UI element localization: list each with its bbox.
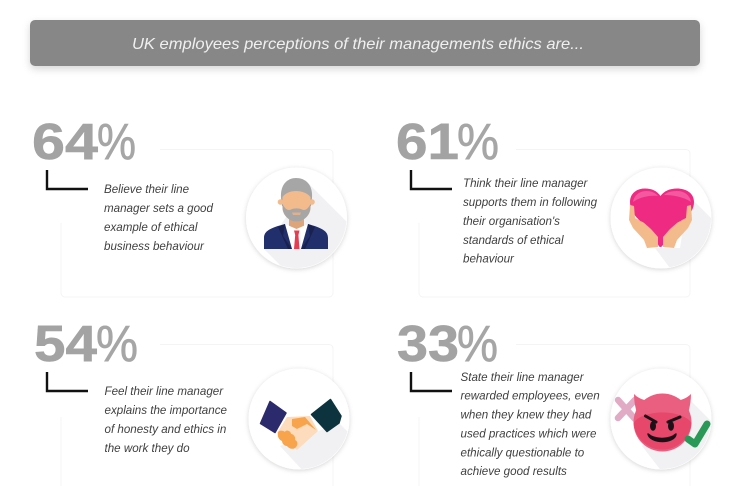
- description text: of honesty and ethics in: [104, 423, 226, 436]
- description text: their organisation's: [463, 215, 560, 228]
- description text: the work they do: [104, 442, 190, 455]
- description text: [463, 177, 598, 266]
- statistic: 33%: [397, 315, 498, 372]
- panel: 33% line manager rewarded questionable practices: [398, 325, 714, 486]
- description text: used practices which were: [460, 428, 597, 440]
- icon: businessman: [244, 166, 349, 272]
- description text: explains the importance: [104, 404, 227, 417]
- description text: State their line manager: [460, 371, 585, 384]
- description text: supports them in following: [463, 196, 598, 209]
- description text: behaviour: [463, 252, 515, 266]
- statistic: 54%: %: [96, 315, 138, 372]
- statistic: 64%: [32, 113, 136, 170]
- statistic: 61%: %: [457, 113, 499, 170]
- description text: rewarded employees, even: [460, 390, 600, 402]
- icon: hands holding heart: [608, 166, 714, 272]
- bracket marker: [47, 372, 88, 391]
- bracket marker: [47, 170, 88, 189]
- panel: 61% line manager supports standards: [398, 123, 714, 298]
- bracket marker: [411, 372, 452, 391]
- description text: [460, 371, 600, 478]
- statistic: 33%: %: [457, 315, 498, 372]
- description text: standards of ethical: [463, 234, 564, 247]
- bracket marker: [411, 170, 452, 189]
- title banner: [30, 20, 700, 66]
- statistic: 64%: %: [97, 113, 136, 170]
- description text: ethically questionable to: [460, 446, 585, 460]
- statistic: 61%: 61: [396, 113, 459, 170]
- description text: achieve good results: [460, 465, 567, 478]
- title banner: UK employees perceptions of their managements ethics are...: [132, 36, 584, 53]
- statistic: 64%: 64: [32, 113, 99, 170]
- statistic: 54%: 54: [34, 315, 98, 372]
- statistic: 61%: [396, 113, 499, 170]
- description text: when they knew they had: [460, 408, 592, 422]
- panel: 64% line manager sets a good example: [32, 113, 360, 297]
- description text: Believe their line: [104, 183, 190, 196]
- description text: Feel their line manager: [104, 385, 224, 398]
- description text: example of ethical: [104, 221, 198, 234]
- statistic: 54%: [34, 315, 138, 372]
- panel: 54% line manager explains honesty: [35, 326, 352, 486]
- icon: handshake: [246, 368, 352, 472]
- description text: Think their line manager: [463, 177, 589, 190]
- description text: [104, 183, 213, 253]
- description text: manager sets a good: [104, 202, 213, 215]
- statistic: 33%: 33: [397, 315, 459, 372]
- description text: business behaviour: [104, 240, 205, 253]
- icon: devil face with cross and tick: [608, 368, 714, 472]
- description text: [104, 385, 227, 455]
